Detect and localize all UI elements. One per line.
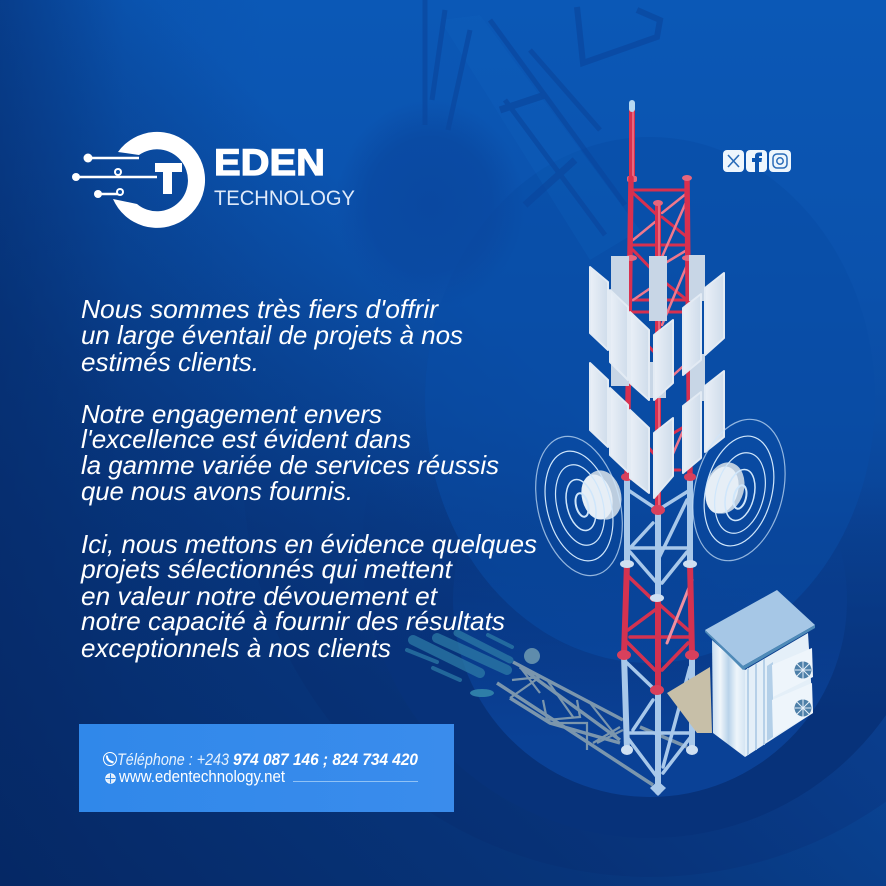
intro paragraph 1: Nous sommes très fiers d'offrir — [81, 294, 439, 324]
wordmark EDEN: EDEN — [214, 142, 325, 183]
cabinet roof — [705, 590, 815, 670]
telephone text: Téléphone : +243 — [117, 750, 229, 769]
tower joints — [617, 473, 699, 796]
microwave dish right — [679, 409, 799, 571]
logo — [72, 132, 355, 228]
AC unit lower — [772, 683, 813, 737]
intro paragraph 2: que nous avons fournis. — [81, 476, 353, 506]
intro paragraph 1: un large éventail de projets à nos — [81, 320, 463, 350]
telecom tower — [522, 100, 799, 796]
icon: facebook — [746, 150, 767, 172]
intro paragraph 3: en valeur notre dévouement et — [81, 581, 439, 611]
cabinet shadow — [667, 667, 712, 733]
signal waves left — [522, 427, 636, 585]
website text: www.edentechnology.net — [118, 767, 285, 786]
icon: globe — [106, 774, 115, 783]
intro paragraph 2: l'excellence est évident dans — [81, 424, 411, 454]
intro paragraph 3: exceptionnels à nos clients — [81, 633, 391, 663]
antenna panels back row — [612, 256, 704, 400]
microwave dish left — [522, 427, 636, 585]
intro paragraph 2 — [81, 399, 499, 506]
cabinet left wall — [712, 640, 745, 757]
antenna panels upper — [590, 267, 724, 400]
AC unit upper — [772, 648, 813, 697]
wordmark TECHNOLOGY: TECHNOLOGY — [214, 187, 355, 210]
intro paragraph 3: notre capacité à fournir des résultats — [81, 606, 505, 636]
contact box — [79, 724, 454, 812]
icon: phone — [104, 752, 116, 766]
ghost tower photo — [425, 0, 660, 260]
social icons — [723, 150, 791, 172]
telephone text: 974 087 146 ; 824 734 420 — [233, 750, 418, 769]
intro paragraph 2: Notre engagement envers — [81, 399, 382, 429]
cabinet right wall — [745, 633, 813, 757]
shadow of antennas — [407, 633, 512, 680]
letter T — [155, 163, 182, 194]
intro paragraph 2: la gamme variée de services réussis — [81, 450, 499, 480]
tower shadow — [407, 633, 687, 785]
signal waves right — [679, 409, 799, 571]
intro paragraph 3: Ici, nous mettons en évidence quelques — [81, 529, 537, 559]
telephone text — [117, 750, 418, 769]
intro paragraph 1 — [81, 294, 463, 377]
logo mark — [72, 132, 205, 228]
icon: instagram — [769, 150, 791, 172]
lower tower lattice — [624, 478, 692, 792]
icon: X — [723, 150, 744, 172]
tower back lattice: red top — [627, 100, 690, 510]
mast — [627, 100, 637, 182]
intro paragraph 1: estimés clients. — [81, 347, 259, 377]
intro paragraph 3: projets sélectionnés qui mettent — [80, 554, 454, 584]
equipment cabinet — [667, 590, 815, 757]
intro paragraph 3 — [80, 529, 537, 663]
antenna panels lower — [590, 363, 724, 498]
